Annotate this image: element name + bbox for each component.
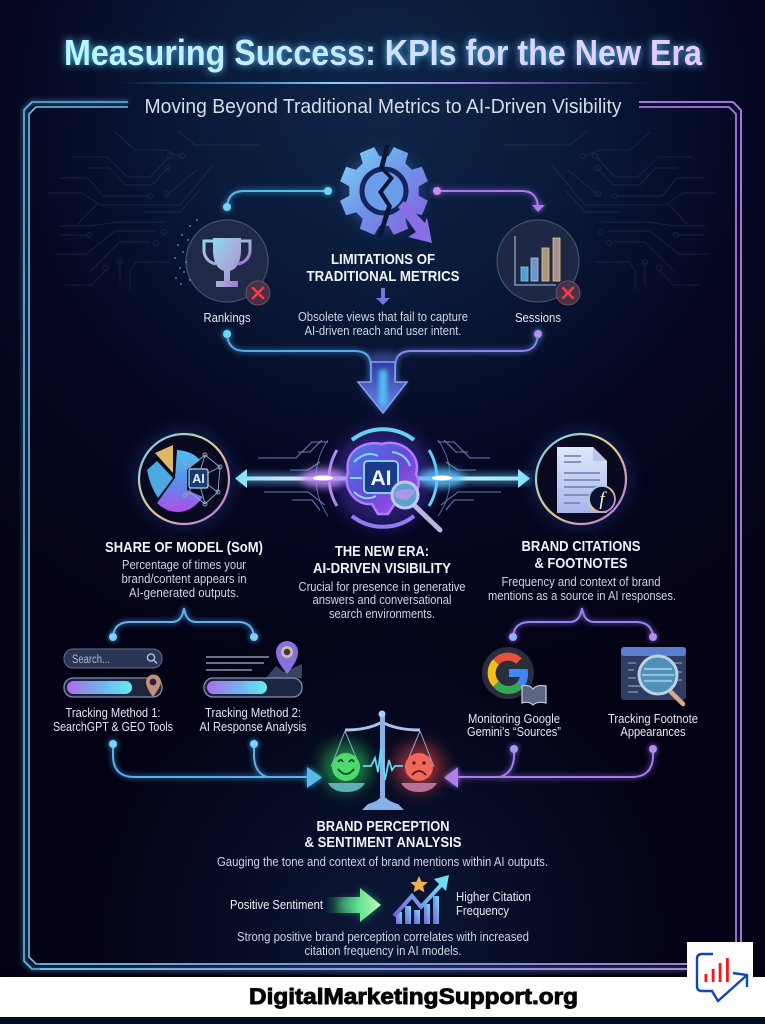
icon: AI brain — [316, 428, 450, 530]
body: new era: answers and conversational — [312, 593, 452, 607]
heading: limitations: TRADITIONAL METRICS — [306, 268, 460, 285]
pin — [276, 641, 298, 674]
star — [410, 876, 428, 892]
outer frame — [24, 102, 741, 969]
pulse line — [363, 748, 403, 780]
label: tracking method 2: Tracking Method 2: — [205, 706, 301, 720]
heading: brand perception: & SENTIMENT ANALYSIS — [304, 834, 462, 851]
body: brand citations: Frequency and context of brand — [502, 575, 661, 589]
broken gear icon — [340, 145, 432, 243]
body: correlation: citation frequency in AI models. — [304, 944, 462, 958]
body: new era: Crucial for presence in generative — [298, 580, 466, 594]
heading: brand perception: BRAND PERCEPTION — [316, 818, 450, 835]
icon: sessions chart — [497, 220, 580, 305]
icon: rankings trophy — [174, 219, 270, 305]
badge: f: f — [599, 489, 607, 510]
title: Measuring Success: KPIs for the New Era — [64, 32, 703, 73]
label: sessions: Sessions — [515, 311, 561, 325]
body: limitations: Obsolete views that fail to capture — [298, 310, 468, 324]
small down arrow — [376, 288, 390, 305]
brace: share of model — [109, 608, 258, 641]
label: tracking method 1: Tracking Method 1: — [66, 706, 160, 720]
heading: limitations — [306, 251, 460, 285]
icon: google — [482, 647, 546, 705]
heading: brand citations: BRAND CITATIONS — [522, 538, 640, 555]
title: Measuring Success: KPIs for the New Era — [64, 32, 703, 73]
body: correlation: Strong positive brand perception correlates with increased — [237, 930, 529, 944]
icon: search bar tracking — [64, 649, 162, 697]
label: tracking method 2 — [200, 706, 306, 734]
body: share of model — [122, 558, 247, 600]
heading: new era: AI-DRIVEN VISIBILITY — [313, 560, 451, 577]
label: tracking footnote — [608, 712, 698, 739]
smile face — [332, 753, 360, 781]
logo — [687, 942, 753, 1001]
flow arrows — [235, 469, 530, 488]
title rule — [120, 82, 650, 84]
subtitle: Moving Beyond Traditional Metrics to AI-Driven Visibility — [144, 96, 622, 118]
search field: Search... — [72, 654, 110, 666]
label: rankings: Rankings — [204, 311, 250, 325]
body: brand perception: Gauging the tone and context of brand mentions within AI outputs. — [217, 855, 548, 869]
body: limitations: AI-driven reach and user intent. — [304, 324, 462, 338]
body: new era — [298, 580, 466, 621]
AI chip: AI — [370, 467, 392, 490]
body: share of model: AI-generated outputs. — [129, 586, 239, 600]
footer band — [0, 975, 765, 1024]
label: higher citation: Higher Citation — [456, 890, 531, 904]
label: tracking footnote: Appearances — [620, 725, 686, 739]
heading: brand citations: & FOOTNOTES — [534, 555, 628, 572]
label: tracking footnote: Tracking Footnote — [608, 712, 698, 726]
magnifier — [392, 482, 440, 530]
heading: brand perception — [304, 818, 462, 851]
circuit pattern left — [48, 130, 260, 290]
heading: share of model: SHARE OF MODEL (SoM) — [105, 539, 263, 556]
merge connectors — [223, 330, 542, 382]
body: limitations — [298, 310, 468, 338]
body: share of model: brand/content appears in — [122, 572, 247, 586]
body: brand citations: mentions as a source in AI responses. — [488, 589, 676, 603]
arrow: green — [325, 888, 381, 922]
brace: brand citations — [509, 608, 657, 641]
label: tracking method 1: SearchGPT & GEO Tools — [53, 720, 173, 734]
body: share of model: Percentage of times your — [122, 558, 246, 572]
big down arrow — [358, 352, 407, 414]
heading: brand citations — [522, 538, 640, 572]
connector: gear to sessions — [433, 187, 545, 212]
body: brand citations — [488, 575, 676, 603]
heading: new era: THE NEW ERA: — [335, 543, 429, 560]
circuit pattern right — [505, 130, 717, 290]
AI chip: AI — [192, 472, 205, 486]
label: monitoring google: Gemini's “Sources” — [467, 725, 561, 739]
heading: new era — [313, 543, 451, 577]
label: tracking method 1 — [53, 706, 173, 734]
progress bar — [64, 678, 162, 697]
badge: rankings x — [246, 281, 270, 305]
connector: tracking to scale — [109, 740, 322, 788]
label: monitoring google — [467, 712, 561, 739]
icon: response analysis tracking — [204, 641, 302, 697]
frown face — [405, 753, 433, 781]
badge: sessions x — [556, 281, 580, 305]
heading: limitations: LIMITATIONS OF — [331, 251, 435, 268]
label: monitoring google: Monitoring Google — [468, 712, 560, 726]
body: new era: search environments. — [329, 607, 435, 621]
icon: browser search — [621, 647, 686, 704]
book — [522, 685, 546, 705]
pin — [146, 674, 161, 697]
label: higher citation — [456, 890, 531, 918]
body: correlation — [237, 930, 529, 958]
connector: citations to scale — [444, 745, 657, 788]
footer text: DigitalMarketingSupport.org — [249, 984, 578, 1009]
flares — [301, 468, 464, 488]
label: higher citation: Frequency — [456, 904, 510, 918]
circuit traces beside brain — [258, 440, 501, 510]
icon: growth chart — [394, 875, 449, 924]
label: positive sentiment: Positive Sentiment — [230, 898, 323, 912]
connector: gear to rankings — [223, 187, 332, 211]
icon: document citation — [531, 429, 631, 529]
icon: share of model — [134, 429, 234, 529]
magnifier — [639, 656, 683, 704]
icon: sentiment scale — [322, 710, 443, 810]
label: tracking method 2: AI Response Analysis — [200, 720, 306, 734]
